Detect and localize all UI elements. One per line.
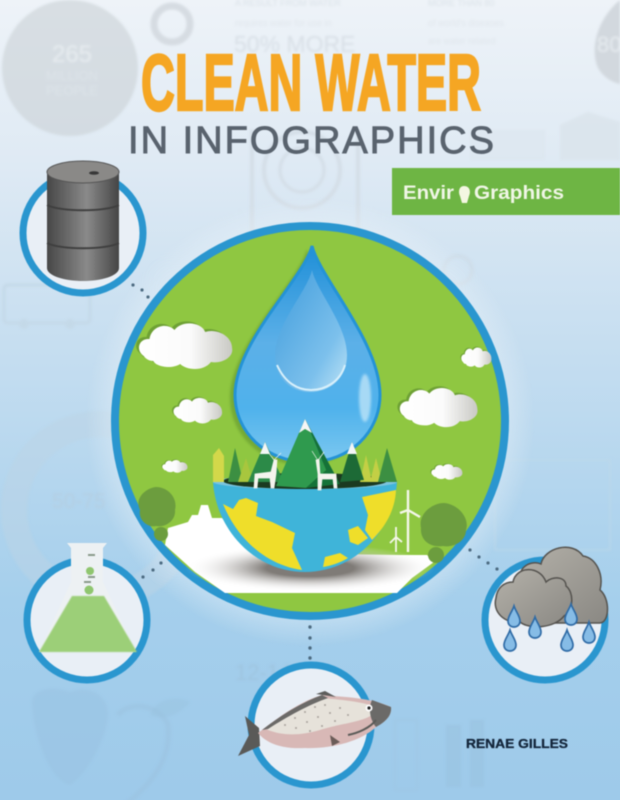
wind turbines — [390, 490, 420, 552]
panel: main circle illustration — [115, 226, 505, 616]
icon: water drop — [230, 246, 380, 465]
icon circle: rain cloud — [485, 547, 608, 680]
deer — [254, 451, 337, 490]
icon: light bulb — [459, 186, 470, 203]
faint background graphics: PEOPLE — [46, 83, 98, 98]
glow behind main circle — [85, 197, 535, 647]
forest band — [213, 419, 397, 490]
author name: RENAE GILLES — [466, 736, 568, 751]
clouds — [136, 321, 491, 480]
subtitle: IN INFOGRAPHICS: IN INFOGRAPHICS — [128, 120, 494, 162]
faint background graphics: 265 — [52, 41, 92, 68]
series banner: EnviroGraphics: Envir — [403, 183, 455, 204]
series banner: EnviroGraphics — [392, 168, 620, 215]
faint background graphics: MILLION — [46, 68, 98, 83]
faint background graphics: 50% MORE — [234, 31, 355, 57]
faint background graphics: of world's diseases — [428, 18, 504, 28]
trees on globe — [213, 448, 397, 484]
faint background graphics: 50-75 — [52, 490, 106, 513]
mountains — [248, 442, 284, 482]
series banner: EnviroGraphics: Graphics — [474, 183, 564, 204]
globe hemisphere — [213, 475, 397, 572]
faint background graphics: are water related — [428, 36, 496, 46]
icon: rain drops — [504, 604, 595, 651]
faint background graphics: 12-14 — [235, 660, 291, 685]
icon: rain cloud — [495, 547, 608, 627]
faint background graphics: requires water for use in — [235, 18, 332, 28]
trees — [138, 487, 467, 563]
white city and ground — [165, 505, 434, 593]
icon: fish — [238, 691, 391, 756]
icon: flask — [39, 543, 137, 652]
shadow under globe — [185, 544, 435, 592]
icon circle: fish — [238, 665, 391, 785]
icon circle: flask — [27, 543, 147, 680]
icon: barrel — [47, 161, 119, 281]
connector dots — [131, 283, 499, 660]
icon circle: oil barrel — [23, 161, 143, 293]
